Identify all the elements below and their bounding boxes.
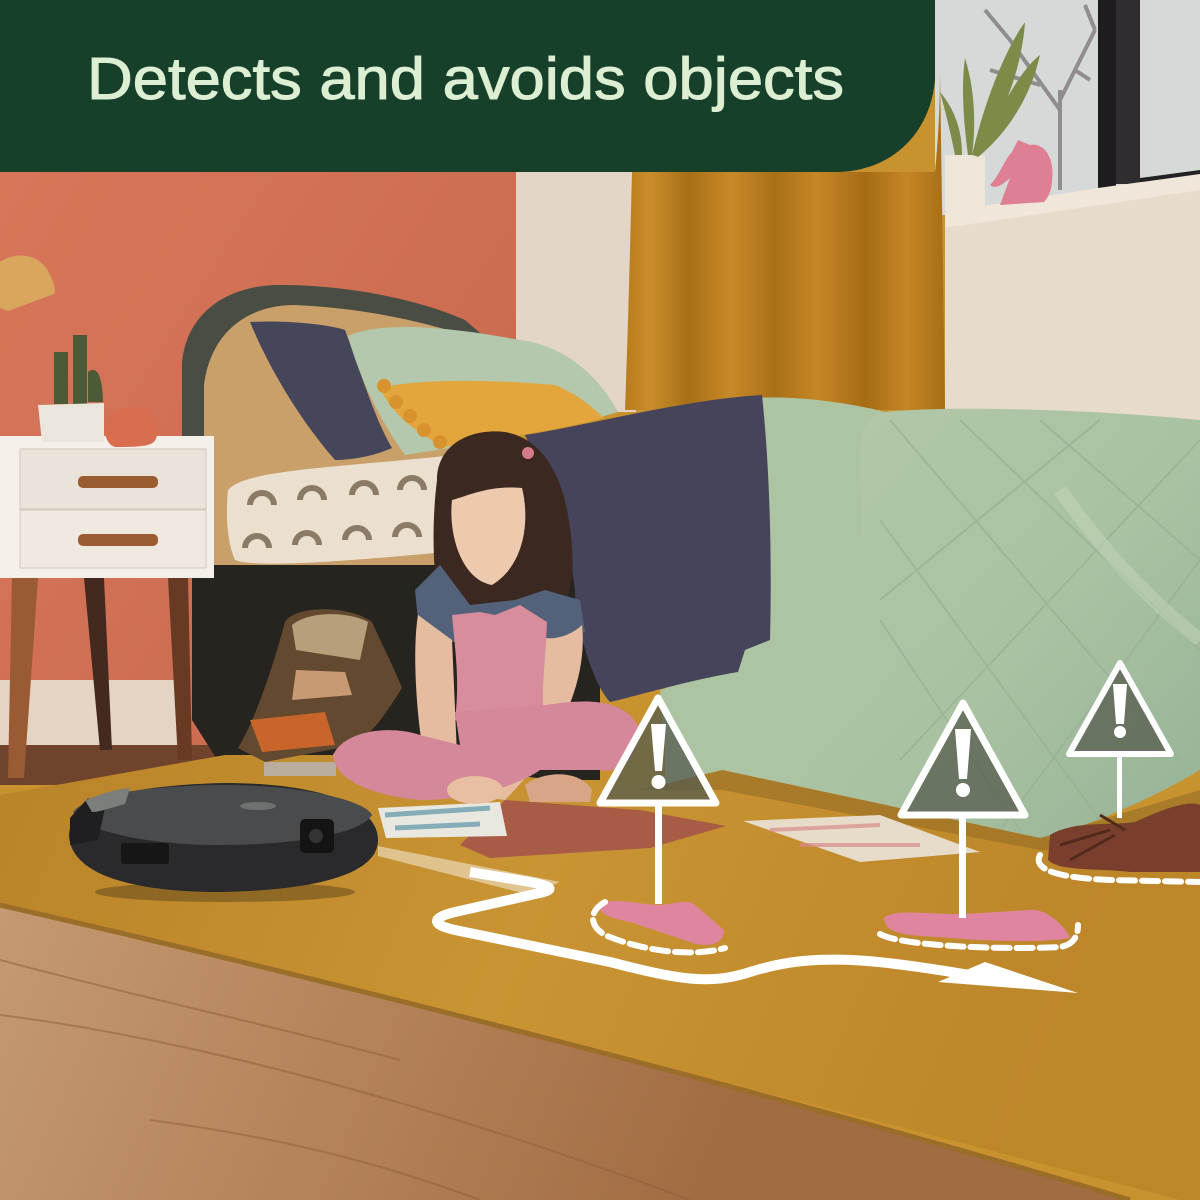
window with tree view	[935, 0, 1200, 215]
warning icon 2	[901, 703, 1025, 918]
bed frame and mattress	[182, 285, 600, 780]
curtain	[625, 70, 945, 410]
dashed outlines around obstacles	[593, 855, 1200, 952]
notebook, drawing papers	[264, 762, 980, 862]
background walls	[0, 172, 636, 785]
warning icon 3	[1069, 663, 1171, 818]
bed quilt	[525, 395, 1200, 838]
title banner	[0, 0, 935, 172]
girl sitting	[333, 431, 640, 804]
right wall and window sill	[945, 174, 1200, 420]
warning icon 1	[600, 698, 716, 904]
pillows	[250, 322, 618, 460]
robot path arrow	[378, 846, 1078, 993]
socks and boot obstacles	[600, 804, 1200, 945]
cactus pot and speaker	[38, 335, 157, 447]
title: Detects and avoids objects	[87, 46, 844, 112]
rug and wood floor	[0, 755, 1200, 1200]
plant and unicorn on window sill	[940, 22, 1053, 211]
nightstand and lamp	[0, 256, 214, 778]
backpack	[238, 609, 402, 762]
robot vacuum	[69, 783, 378, 902]
